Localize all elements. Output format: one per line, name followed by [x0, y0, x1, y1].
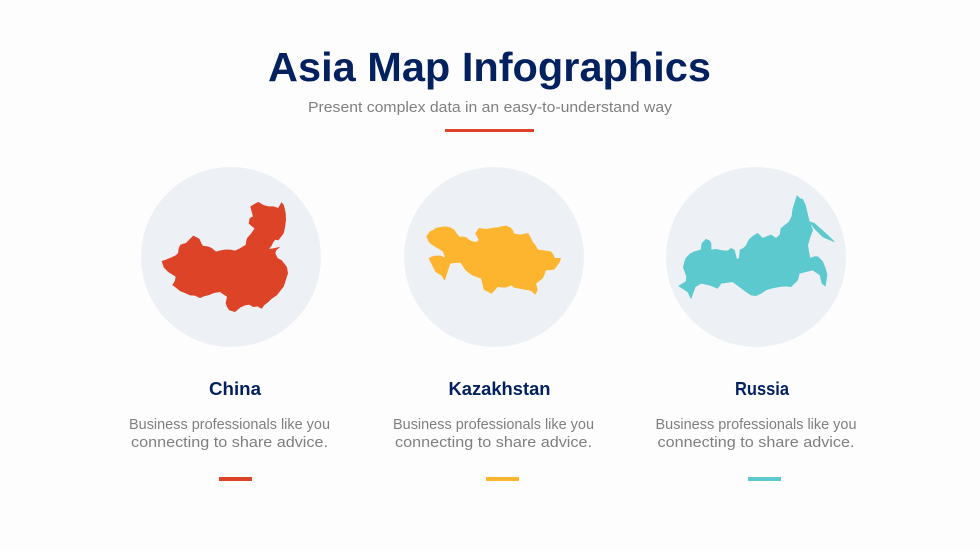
- panel: Russia: [656, 167, 856, 481]
- heading: China: China: [209, 378, 262, 399]
- text: China description: Business professionals like you: [129, 416, 330, 433]
- text: Russia description: Business professionals like you: [656, 416, 856, 433]
- title accent bar: [445, 129, 534, 132]
- map: China: [162, 202, 288, 312]
- accent bar: Russia: [748, 477, 781, 481]
- text: Kazakhstan description: [393, 416, 594, 451]
- panel: Kazakhstan: [393, 167, 594, 481]
- heading: Kazakhstan: Kazakhstan: [448, 378, 550, 399]
- subtitle: Present complex data in an easy-to-understand way: [308, 99, 673, 116]
- map: Russia: [679, 196, 834, 298]
- accent bar: China: [219, 477, 252, 481]
- circle: Russia background: [666, 167, 846, 347]
- circle: China background: [141, 167, 321, 347]
- text: Russia description: [656, 416, 856, 451]
- title: Asia Map Infographics: [268, 44, 711, 90]
- text: China description: connecting to share advice.: [131, 434, 328, 451]
- heading: Russia: Russia: [735, 378, 790, 399]
- accent bar: Kazakhstan: [486, 477, 519, 481]
- map: Kazakhstan: [427, 226, 561, 294]
- text: Russia description: connecting to share advice.: [658, 434, 854, 451]
- text: China description: [129, 416, 330, 451]
- panel: China: [129, 167, 330, 481]
- circle: Kazakhstan background: [404, 167, 584, 347]
- text: Kazakhstan description: Business professionals like you: [393, 416, 594, 433]
- text: Kazakhstan description: connecting to share advice.: [395, 434, 592, 451]
